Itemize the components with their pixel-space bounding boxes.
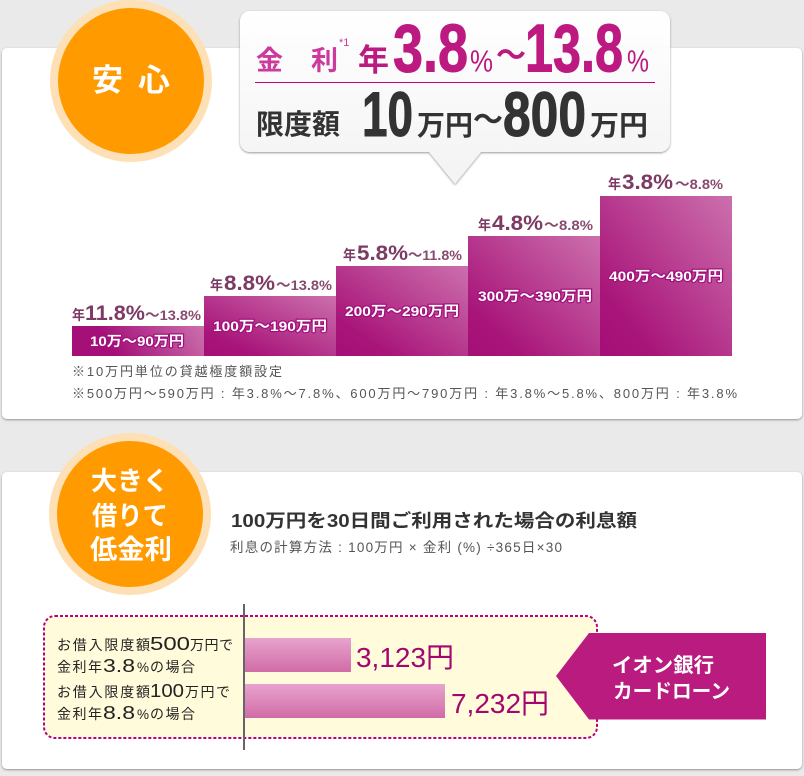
calculation method: 利息の計算方法 : 100万円 × 金利 (%) ÷365日×30 xyxy=(230,539,562,555)
comparison box xyxy=(44,616,597,738)
label: 500万円 case: の場合 xyxy=(150,659,195,675)
label: 500万円 case: 500 xyxy=(150,634,190,654)
label: 100万円 case xyxy=(57,681,230,723)
interest rate line: *1 xyxy=(339,37,349,49)
bar: 7,232円: 7,232円 xyxy=(451,688,549,719)
limit line: 万円 xyxy=(417,110,473,141)
bar: 300万〜390万円 xyxy=(468,212,600,356)
interest rate line xyxy=(256,10,649,86)
bar: 100万〜190万円 xyxy=(204,272,336,356)
label: 500万円 case: お借入限度額 xyxy=(57,637,150,653)
bar: 10万〜90万円 xyxy=(72,302,204,356)
limit line: 800 xyxy=(503,80,586,150)
bar: 300万〜390万円: 300万〜390万円 xyxy=(478,288,592,304)
bar: 200万〜290万円: 〜11.8% xyxy=(408,247,463,263)
bar: 300万〜390万円: 4.8% xyxy=(492,212,543,235)
label: 500万円 case: 3.8 xyxy=(103,656,135,676)
interest rate line: 金 xyxy=(256,46,283,76)
bar: 10万〜90万円: 年 xyxy=(72,307,85,323)
interest rate line: 13.8 xyxy=(525,10,623,86)
bar: 10万〜90万円: 11.8% xyxy=(85,302,145,325)
interest rate line: % xyxy=(627,44,649,78)
interest rate line: 3.8 xyxy=(393,10,468,86)
interest rate line: % xyxy=(470,44,493,78)
badge: 大きく借りて低金利 xyxy=(49,433,211,595)
axis line xyxy=(243,604,245,750)
bar: 400万〜490万円: 年 xyxy=(608,176,621,192)
label: 100万円 case: お借入限度額 xyxy=(57,684,150,700)
limit line: 限度額 xyxy=(256,109,340,140)
label: 500万円 case xyxy=(57,634,233,676)
bar: 10万〜90万円: 10万〜90万円 xyxy=(90,333,184,349)
panel: big loan low rate xyxy=(2,433,802,769)
bar: 200万〜290万円: 200万〜290万円 xyxy=(345,303,459,319)
bar: 300万〜390万円: 年 xyxy=(478,217,491,233)
interest rate line: 年 xyxy=(358,43,389,78)
bar: 100万〜190万円: 8.8% xyxy=(224,272,275,295)
label: 100万円 case: 万円で xyxy=(185,684,230,700)
label: 500万円 case: 金利年 xyxy=(57,659,102,675)
badge: 大きく借りて低金利: 低金利 xyxy=(90,535,172,565)
label: 100万円 case: % xyxy=(137,706,149,722)
limit line: 万円 xyxy=(590,110,648,141)
label: 100万円 case: 8.8 xyxy=(103,703,135,723)
bar: 100万〜190万円: 100万〜190万円 xyxy=(213,318,327,334)
badge: 大きく借りて低金利: 大きく xyxy=(91,466,169,496)
interest rate line: 〜 xyxy=(496,38,526,73)
bar: 400万〜490万円: 〜8.8% xyxy=(675,176,724,192)
limit line xyxy=(256,80,648,150)
footnotes: ※10万円単位の貸越極度額設定 xyxy=(72,364,282,379)
label: 100万円 case: の場合 xyxy=(150,706,195,722)
bar: 10万〜90万円: 〜13.8% xyxy=(145,307,202,323)
footnotes: ※500万円〜590万円 : 年3.8%〜7.8%、600万円〜790万円 : 年3.8%〜5.8%、800万円 : 年3.8% xyxy=(72,386,737,401)
badge: 安心: 安 xyxy=(92,63,123,98)
badge: 安心: 心 xyxy=(138,63,170,98)
bar: 400万〜490万円: 400万〜490万円 xyxy=(609,268,723,284)
limit line: 〜 xyxy=(473,104,503,137)
bar chart: rates by limit xyxy=(72,171,732,356)
interest rate line: 利 xyxy=(311,46,338,76)
bar: 400万〜490万円: 3.8% xyxy=(622,171,673,194)
label: 500万円 case: % xyxy=(137,659,149,675)
bar: 200万〜290万円: 年 xyxy=(343,247,356,263)
badge: 大きく借りて低金利: 借りて xyxy=(92,501,168,531)
bar: 3,123円 xyxy=(245,638,454,673)
bar: 100万〜190万円: 〜13.8% xyxy=(276,277,333,293)
label: 100万円 case: 100 xyxy=(150,681,184,701)
bar: 3,123円: 3,123円 xyxy=(356,642,454,673)
bar: 300万〜390万円: 〜8.8% xyxy=(544,217,594,233)
label: 500万円 case: 万円で xyxy=(190,637,233,653)
arrow tag: イオン銀行カードローン xyxy=(556,633,766,720)
label: 100万円 case: 金利年 xyxy=(57,706,102,722)
bar: 200万〜290万円: 5.8% xyxy=(357,242,408,265)
footnotes xyxy=(72,364,737,401)
callout: interest rate and limit xyxy=(240,10,670,184)
bar: 400万〜490万円 xyxy=(600,171,732,356)
bar: 100万〜190万円: 年 xyxy=(210,277,223,293)
bar: 200万〜290万円 xyxy=(336,242,468,356)
heading: interest example: 100万円を30日間ご利用された場合の利息額 xyxy=(231,510,637,531)
bar: 7,232円 xyxy=(245,684,549,719)
panel: reassurance rate tiers xyxy=(2,0,802,419)
arrow tag: イオン銀行カードローン: カードローン xyxy=(613,681,730,703)
arrow tag: イオン銀行カードローン: イオン銀行 xyxy=(612,654,714,677)
badge: 安心 xyxy=(50,0,212,162)
limit line: 10 xyxy=(362,80,413,150)
